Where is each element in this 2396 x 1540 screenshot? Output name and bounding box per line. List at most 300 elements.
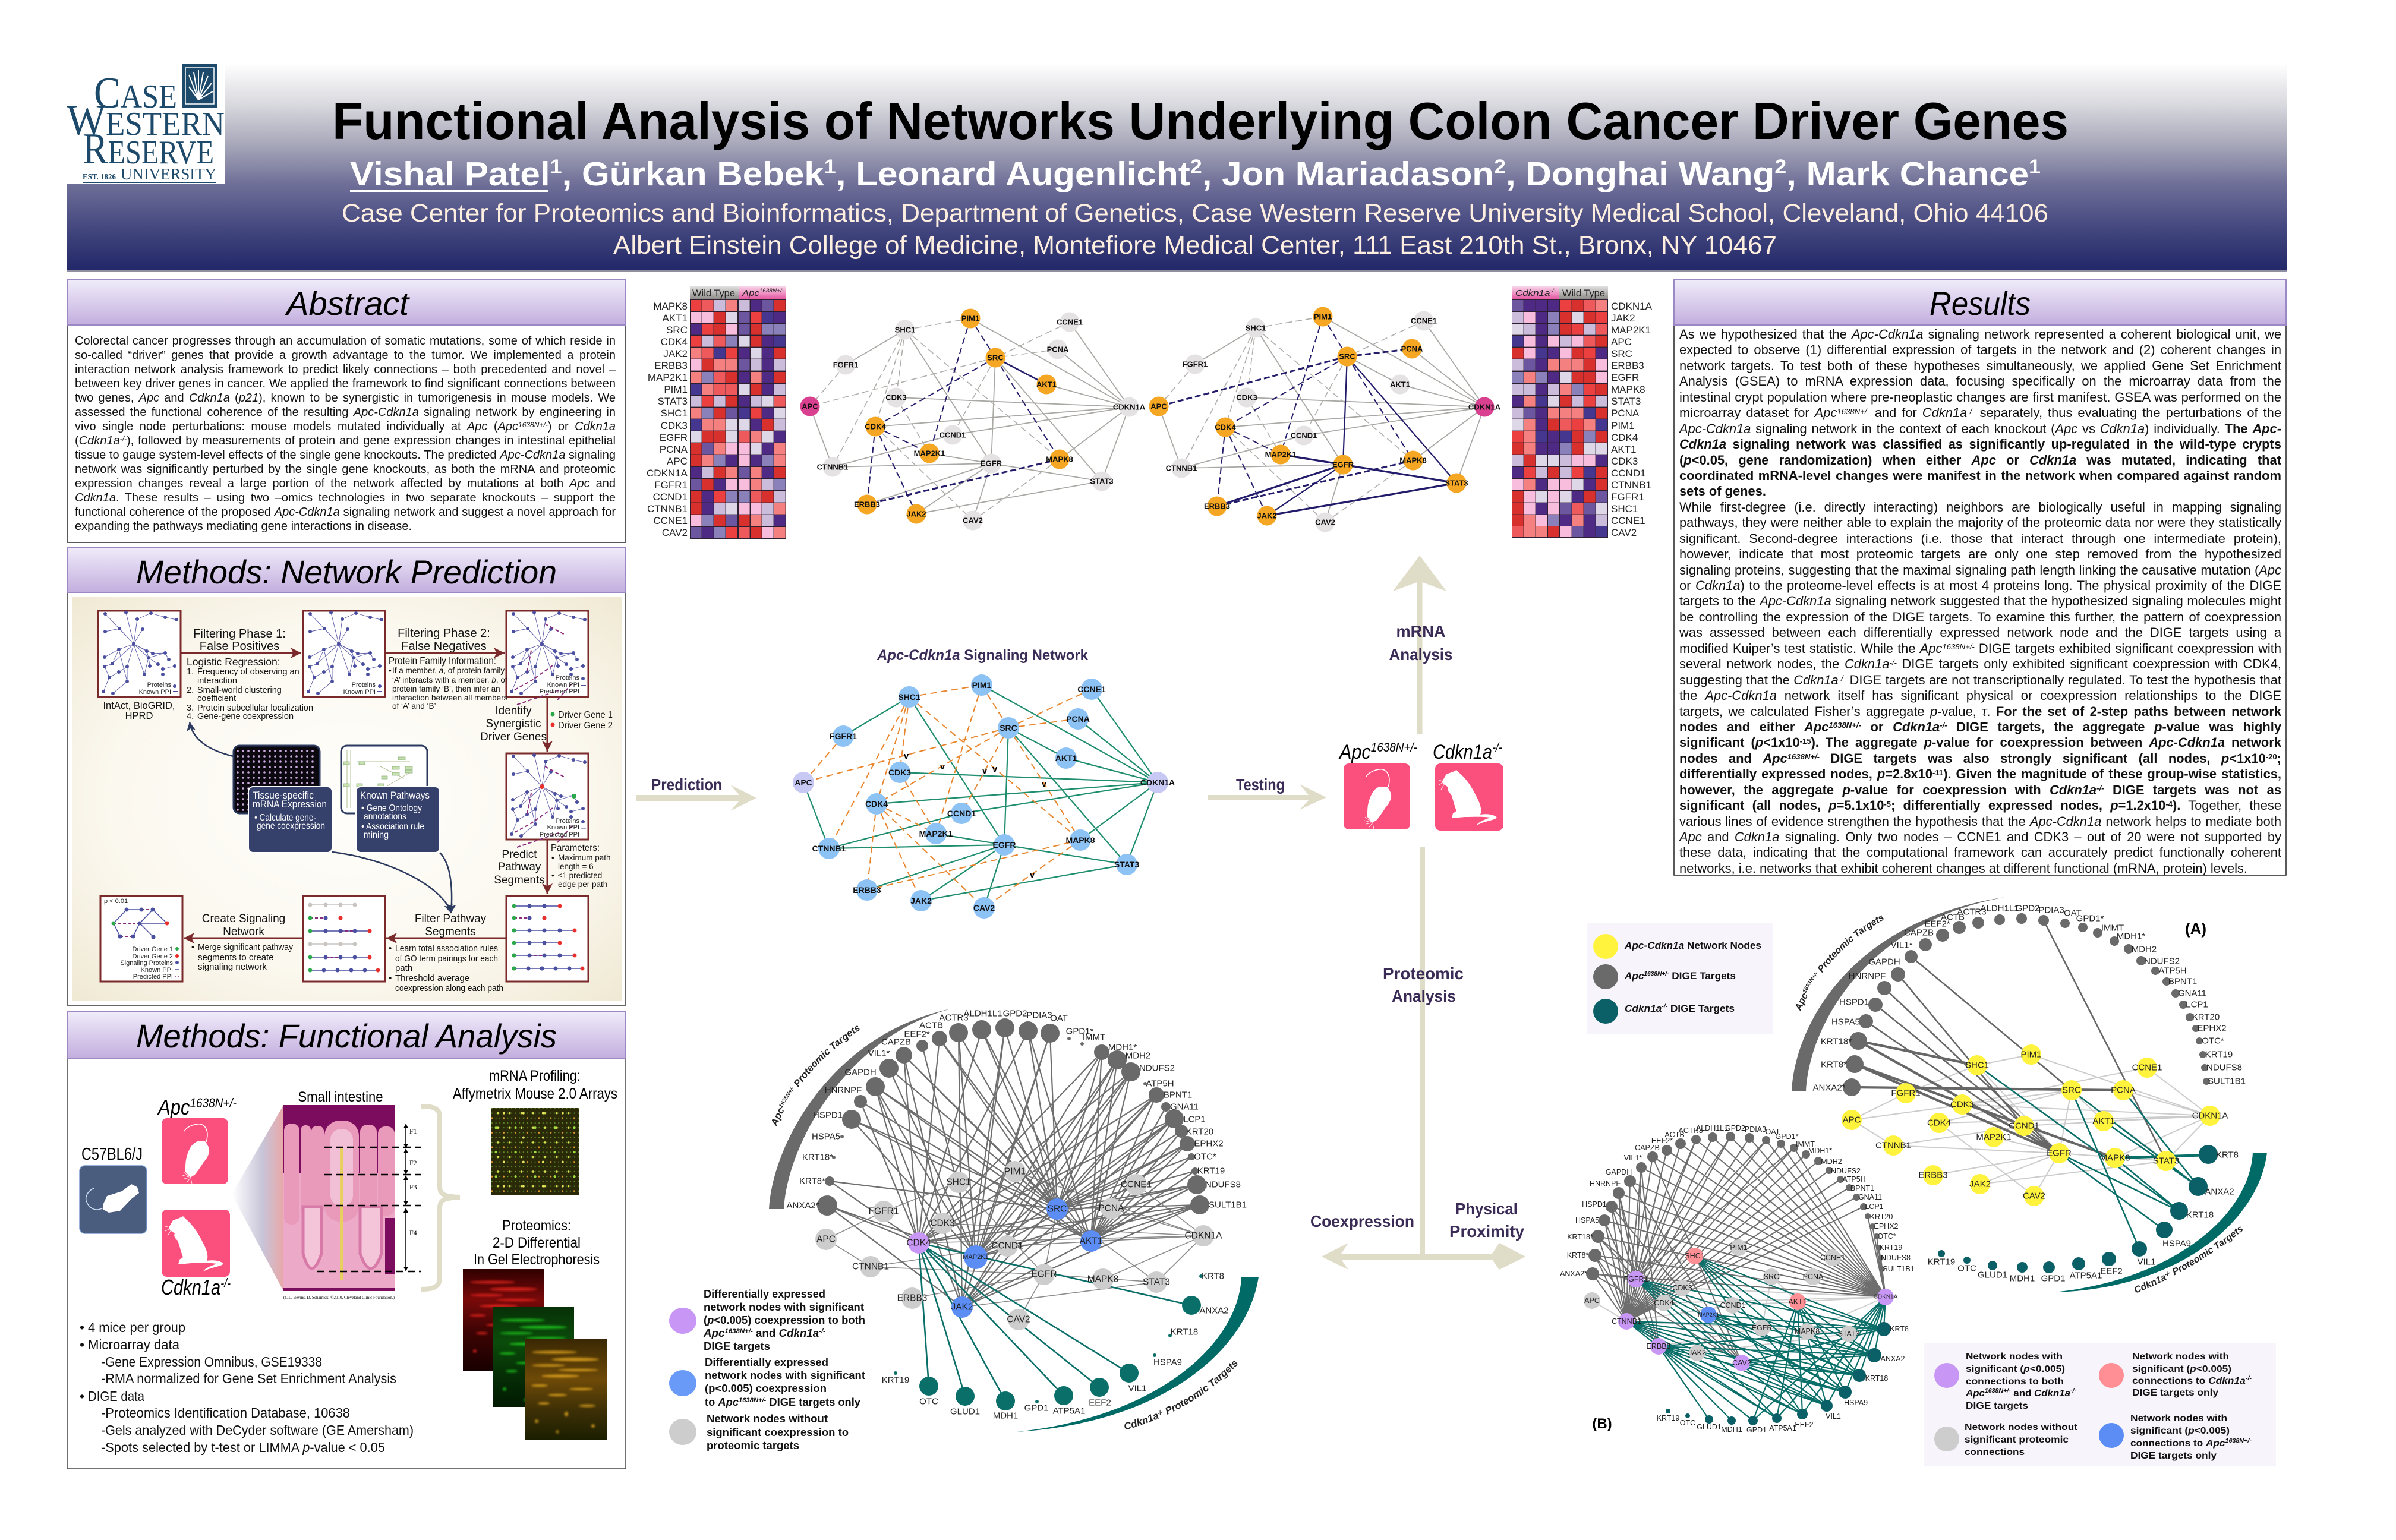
outer target labels: ACTR3 xyxy=(939,1012,969,1023)
logo: Case Western Reserve University: UNIVERSITY xyxy=(121,165,216,183)
nodes: CDKN1A xyxy=(1113,403,1146,411)
abstract text: vivo single node perturbations: mouse models mutated individually at Apc (Apc1638N+/-) or Cdkn1a xyxy=(75,420,616,433)
methods bullet list: -Proteomics Identification Database, 10638 xyxy=(101,1405,350,1421)
small intestine illustration: Small intestine xyxy=(298,1089,383,1105)
panel: abstract frame xyxy=(67,280,626,542)
outer target labels: MDH1 xyxy=(1721,1425,1742,1434)
legend: physical proximity network B: -/- xyxy=(2070,1388,2077,1394)
legend: physical proximity network B: 1638N+/- xyxy=(2225,1438,2252,1444)
outer target labels: ACTR3 xyxy=(1679,1126,1703,1135)
heatmap gene labels: AKT1 xyxy=(1611,444,1637,455)
heatmap gene labels: EGFR xyxy=(1611,372,1639,383)
figure captions: Predict xyxy=(502,848,537,861)
mRNA network: Apc knockout xyxy=(800,309,1146,530)
heatmap gene labels: AKT1 xyxy=(662,313,688,324)
abstract text: functional coherence of the proposed Apc-Cdkn1a signaling network and suggest a novel approach for xyxy=(75,506,616,519)
nodes: STAT3 xyxy=(1445,479,1468,487)
outer target labels: EEF2* xyxy=(904,1029,930,1040)
figure captions: • xyxy=(389,973,392,983)
legend: coexpression network: 1638N+/- xyxy=(724,1328,753,1335)
nodes: CDKN1A xyxy=(1140,778,1175,787)
nodes: SHC1 xyxy=(895,326,915,334)
outer target labels: GAPDH xyxy=(1868,957,1900,967)
outer target labels: ACTR3 xyxy=(1957,907,1987,917)
panel: methods network prediction xyxy=(67,547,626,1005)
legend: coexpression network: DIGE targets xyxy=(704,1340,770,1352)
nodes: APC xyxy=(802,402,818,411)
legend: physical proximity node colours: Apc-Cdkn1a Network Nodes xyxy=(1624,940,1761,951)
figure captions: edge per path xyxy=(558,880,607,889)
nodes: MAPK8 xyxy=(1046,455,1073,463)
network nodes: ERBB3 xyxy=(897,1293,927,1304)
authors: 1 xyxy=(2029,156,2041,178)
figure captions: Network xyxy=(223,926,264,938)
outer target labels: ANXA2 xyxy=(2205,1187,2234,1197)
nodes: CCNE1 xyxy=(1057,317,1083,327)
arc: Apc proteomic targets xyxy=(1792,897,2005,1091)
network nodes: PCNA xyxy=(1098,1204,1124,1213)
wild type mouse: C57BL6/J xyxy=(81,1145,143,1164)
card: known pathways: mining xyxy=(364,830,389,840)
outer target labels: GPD2 xyxy=(1725,1124,1745,1132)
physical proximity network B xyxy=(1560,1124,1915,1434)
heatmap gene labels: CCND1 xyxy=(1611,468,1646,479)
outer target labels: GPD1 xyxy=(1024,1403,1048,1413)
heatmap gene labels: JAK2 xyxy=(663,348,688,359)
heatmap gene labels: PIM1 xyxy=(1611,420,1635,431)
heatmap gene labels: CCND1 xyxy=(652,491,688,503)
outer target labels: HNRNPF xyxy=(1590,1179,1621,1188)
network nodes: CCND1 xyxy=(1720,1301,1746,1309)
panel: results frame xyxy=(1674,280,2286,875)
Apc mouse xyxy=(157,1095,237,1184)
heatmap gene labels: MAPK8 xyxy=(653,301,688,312)
outer target labels: CAPZB xyxy=(881,1037,911,1047)
figure captions: Filter Pathway xyxy=(415,913,487,925)
network nodes: STAT3 xyxy=(2153,1156,2179,1166)
outer target labels: KRT19 xyxy=(882,1375,909,1386)
arc: Cdkn1a proteomic targets: Cdkn1a xyxy=(1124,1413,1159,1429)
network nodes: PIM1 xyxy=(1004,1167,1026,1176)
abstract text: so-called “driver” genes that provide a growth advantage to the tumor. We implemented a protein xyxy=(75,349,616,362)
outer target labels: OTC xyxy=(1680,1419,1695,1427)
outer target labels: GNA11 xyxy=(1858,1193,1882,1201)
outer target labels: VIL1* xyxy=(1891,940,1913,951)
box legends: Proteins xyxy=(556,674,579,681)
results text: pathways, they were neither able to explain the majority of the proteomic data nor were they statistically xyxy=(1679,515,2281,530)
authors xyxy=(350,155,2041,193)
heatmap gene labels: CCNE1 xyxy=(1611,515,1645,526)
arc: Apc proteomic targets: Proteomic Targets xyxy=(1814,913,1886,977)
network nodes: MAP2K1 xyxy=(1976,1132,2012,1142)
outer target labels: ANXA2* xyxy=(1560,1270,1587,1278)
arc: Apc proteomic targets: Apc xyxy=(1796,993,1808,1011)
knockout mice xyxy=(1338,741,1503,831)
legend: coexpression network: significant coexpression to xyxy=(707,1427,849,1438)
legend: coexpression network: Apc xyxy=(703,1327,753,1339)
figure captions: Filtering Phase 2: xyxy=(398,627,490,640)
figure captions: of ‘A’ and ‘B’ xyxy=(392,702,436,711)
outer target labels: KRT8* xyxy=(1567,1251,1588,1260)
physical proximity network B: (B) xyxy=(1592,1416,1612,1432)
abstract text: network was significantly perturbed by the single gene knockouts, as both the mRNA and proteomic xyxy=(75,463,616,476)
panel: methods functional analysis xyxy=(67,1012,626,1469)
affiliation 2: Albert Einstein College of Medicine, Montefiore Medical Center, 111 East 210th St., Bronx, NY 10467 xyxy=(613,231,1777,260)
proteomics gels: Proteomics: xyxy=(502,1217,571,1234)
outer target labels: HNRNPF xyxy=(825,1085,862,1096)
nodes: JAK2 xyxy=(1257,511,1277,520)
outer target labels: KRT8* xyxy=(1821,1060,1847,1069)
network nodes: MAPK8 xyxy=(1795,1327,1820,1336)
outer target labels: GNA11 xyxy=(1170,1102,1199,1112)
legend: physical proximity node colours: 1638N+/- xyxy=(1644,971,1669,977)
heatmap cells xyxy=(691,300,786,538)
network nodes: STAT3 xyxy=(1143,1277,1170,1287)
nodes: AKT1 xyxy=(1036,380,1057,389)
nodes: APC xyxy=(795,778,812,787)
arrow: prediction xyxy=(636,775,756,811)
abstract text: two genes, Apc and Cdkn1a (p21), known to be synergistic in tumorigenesis in mouse models. We xyxy=(75,392,616,405)
legend: physical proximity network B: DIGE targets xyxy=(1966,1401,2028,1411)
results text: modified Kuiper’s test statistic. While the Apc1638N+/- DIGE targets exhibited significant coexpression with xyxy=(1679,641,2281,656)
network nodes: FGFR1 xyxy=(869,1206,898,1217)
figure captions: Protein subcellular localization xyxy=(197,703,313,713)
outer target labels: OAT xyxy=(2064,908,2082,919)
nodes: FGFR1 xyxy=(833,360,858,370)
authors: 2 xyxy=(1494,156,1506,178)
heatmap gene labels: SRC xyxy=(1611,348,1632,359)
outer target labels: VIL1 xyxy=(1826,1412,1841,1421)
outer target nodes xyxy=(1843,913,2210,1096)
legend: coexpression network: Network nodes without xyxy=(707,1413,828,1425)
abstract text: expanding the pathways mediating gene interactions in disease. xyxy=(75,520,412,533)
authors: , Donghai Wang xyxy=(1506,155,1774,193)
heatmap gene labels: STAT3 xyxy=(658,396,688,407)
network nodes: ERBB3 xyxy=(1646,1342,1671,1350)
outer target labels: GPD1* xyxy=(1776,1132,1799,1141)
arc: Apc proteomic targets: 1638N+/- xyxy=(1803,972,1817,993)
small intestine illustration: (C.L. Bevins, D. Schamick. ©2010, Cleveland Clinic Foundation.) xyxy=(283,1295,395,1300)
legend marks for boxes xyxy=(173,677,586,828)
box legends: Predicted PPI xyxy=(540,688,579,695)
heatmap gene labels: ERBB3 xyxy=(1611,360,1644,371)
abstract text xyxy=(75,334,616,534)
abstract text: expression changes reveal a large portion of the network affected by mutations at both Apc and xyxy=(75,477,616,490)
outer target labels: KRT18 xyxy=(1865,1374,1888,1383)
heatmap: Cdkn1a vs wild type xyxy=(1512,286,1653,538)
outer target labels: ANXA2* xyxy=(1812,1083,1846,1093)
outer target labels: EEF2 xyxy=(2100,1267,2123,1276)
arrows: proteomic analysis, coexpression and physical proximity: Physical xyxy=(1455,1200,1518,1218)
network nodes: FGFR1 xyxy=(1624,1275,1648,1283)
network nodes: SHC1 xyxy=(1965,1060,1989,1071)
outer target labels: SULT1B1 xyxy=(1883,1265,1915,1273)
title banner xyxy=(65,64,2287,272)
nodes: CCNE1 xyxy=(1077,684,1106,694)
network nodes: CCNE1 xyxy=(1820,1254,1845,1262)
heatmap gene labels: CDKN1A xyxy=(1611,301,1653,312)
network nodes: SHC1 xyxy=(1685,1252,1705,1260)
figure captions: Driver Gene 2 xyxy=(558,721,613,731)
figure captions: Small-world clustering xyxy=(197,686,282,695)
network nodes: CTNNB1 xyxy=(852,1262,889,1271)
network nodes: SRC xyxy=(2062,1085,2081,1096)
authors: , Mark Chance xyxy=(1786,155,2029,193)
methods bullet list: -Gels analyzed with DeCyder software (GE Amersham) xyxy=(101,1422,414,1438)
outer target labels: GPD1* xyxy=(2076,914,2104,923)
network nodes: CDKN1A xyxy=(1185,1231,1222,1241)
mRNA profiling: mRNA Profiling: xyxy=(489,1068,581,1084)
outer target labels: KRT20 xyxy=(1186,1126,1213,1137)
heatmap gene labels: CTNNB1 xyxy=(1611,479,1651,491)
heatmap gene labels: SHC1 xyxy=(661,408,688,419)
network prediction boxes xyxy=(98,611,588,982)
network nodes: CCNE1 xyxy=(2132,1062,2162,1073)
abstract text: tissue to gauge system-level effects of the single gene knockouts. The predicted Apc-Cdkn1a signaling xyxy=(75,449,616,462)
outer target labels: KRT19 xyxy=(1880,1244,1902,1252)
network nodes: CCNE1 xyxy=(1121,1180,1152,1189)
nodes: PCNA xyxy=(1066,714,1090,724)
outer target labels: EEF2 xyxy=(1089,1397,1111,1408)
outer target labels: HSPD1 xyxy=(813,1110,843,1121)
outer target labels: ATP5H xyxy=(1842,1175,1866,1184)
known pathways thumbnail xyxy=(341,746,427,813)
outer target labels: GLUD1 xyxy=(1978,1270,2007,1280)
legend: coexpression network: -/- xyxy=(819,1328,825,1335)
heatmap gene labels: PCNA xyxy=(1611,408,1640,419)
figure captions: • xyxy=(389,943,392,954)
authors: , Jon Mariadason xyxy=(1202,155,1494,193)
heatmap gene labels: CDK4 xyxy=(661,336,688,348)
outer target labels: HSPA9 xyxy=(1844,1399,1868,1407)
network nodes: STAT3 xyxy=(1837,1330,1860,1338)
results text: intestinal crypt population where pre-neoplastic changes are first manifest. GSEA was performed on the xyxy=(1679,390,2281,405)
methods bullet list: -Gene Expression Omnibus, GSE19338 xyxy=(101,1354,322,1369)
methods bullet list: Microarray data xyxy=(88,1337,179,1352)
figure captions: Segments xyxy=(494,874,545,886)
network nodes: CDKN1A xyxy=(1874,1294,1898,1300)
results text: however, indicate that most proteomic targets are only one step removed from the hypothesized xyxy=(1679,547,2281,561)
legend: coexpression network: and xyxy=(753,1327,779,1339)
figure captions: coefficient xyxy=(197,694,236,703)
outer target labels: KRT8 xyxy=(1202,1271,1224,1281)
outer target labels: KRT18* xyxy=(1821,1036,1852,1047)
abstract text: Cdkn1a. These results – using two –omics technologies in two separate knockouts – support the xyxy=(75,491,616,504)
nodes: FGFR1 xyxy=(1183,360,1208,368)
legend: coexpression network: network nodes with significant xyxy=(705,1369,865,1381)
results text: significant (all nodes, p=5.1x10-5; differentially expressed nodes, p=1.2x10-4). Together, these xyxy=(1679,798,2281,813)
legend: coexpression network: Differentially expressed xyxy=(705,1356,828,1368)
small intestine illustration xyxy=(232,1089,421,1300)
card: known pathways: annotations xyxy=(364,812,406,822)
nodes: CDK4 xyxy=(865,422,886,431)
network nodes: CDK3 xyxy=(1672,1284,1692,1292)
figure captions: Synergistic xyxy=(486,718,541,730)
nodes: CDK4 xyxy=(865,799,888,809)
outer target labels: ACTB xyxy=(1664,1131,1685,1139)
network nodes: CDK4 xyxy=(1927,1118,1951,1128)
outer target labels: GPD2 xyxy=(2016,903,2039,914)
outer target labels: ANXA2 xyxy=(1199,1306,1229,1315)
heatmap: Cdkn1a vs wild type: Wild Type xyxy=(1562,288,1605,299)
outer target labels: ACTB xyxy=(1941,913,1965,922)
arrow: testing: Testing xyxy=(1236,775,1285,794)
outer target labels: KRT18* xyxy=(1567,1233,1593,1241)
outer target labels: OTC* xyxy=(1194,1151,1216,1162)
methods bullet list: • xyxy=(80,1320,84,1335)
authors: 2 xyxy=(1190,156,1202,178)
authors: Vishal Patel xyxy=(350,155,540,193)
nodes: CCND1 xyxy=(1291,431,1317,440)
outer target labels: NDUFS8 xyxy=(1881,1254,1911,1262)
figure captions: Frequency of observing an xyxy=(197,667,300,677)
figure captions: 4. xyxy=(187,712,194,721)
outer target labels: ALDH1L1 xyxy=(963,1009,1002,1018)
outer target labels: GLUD1 xyxy=(1697,1423,1722,1431)
outer target labels: ATP5H xyxy=(2158,966,2187,976)
results text: targets, we calculated Fisher’s aggregate p-value, τ. For the set of 2-step paths between network xyxy=(1679,703,2281,719)
outer target labels: ALDH1L1 xyxy=(1980,903,2019,914)
network nodes: MAP2K1 xyxy=(1698,1312,1719,1318)
nodes: CDKN1A xyxy=(1468,403,1501,411)
box legends xyxy=(120,674,579,980)
figure captions: Segments xyxy=(425,926,476,938)
results text: significant. Second-degree interactions (i.e. those that interact through one intermediate protein), xyxy=(1679,531,2281,546)
heatmap: wild type vs Apc: 1638N+/- xyxy=(759,288,784,294)
network nodes: CDK4 xyxy=(1654,1299,1674,1307)
heatmap gene labels: CDK3 xyxy=(1611,456,1638,467)
results text: Analysis (GSEA) to mRNA expression data, focusing specifically on the microarray data from the xyxy=(1679,374,2281,389)
nodes: JAK2 xyxy=(910,896,932,905)
results text: sets of genes. xyxy=(1679,484,1766,498)
outer target labels: LCP1 xyxy=(2186,999,2208,1010)
heatmap gene labels: CDK4 xyxy=(1611,432,1638,443)
outer target labels: KRT18 xyxy=(2186,1210,2214,1220)
arc: Cdkn1a proteomic targets: -/- xyxy=(2164,1270,2172,1278)
figure captions: Threshold average xyxy=(395,973,469,983)
arc: Cdkn1a proteomic targets: Proteomic Targets xyxy=(2168,1224,2245,1279)
signaling network result: p < 0.01 xyxy=(104,898,128,905)
nodes: CTNNB1 xyxy=(1166,463,1197,473)
legend: physical proximity network B: DIGE targets only xyxy=(2132,1388,2218,1398)
heatmap gene labels: APC xyxy=(667,456,688,467)
outer target labels: OAT xyxy=(1766,1128,1780,1136)
nodes: AKT1 xyxy=(1055,753,1077,763)
legend: physical proximity node colours: DIGE Targets xyxy=(1667,1003,1735,1014)
box legends: Driver Gene 1 xyxy=(133,946,173,953)
heatmap cells xyxy=(1512,300,1607,537)
heatmap gene labels: CDK3 xyxy=(661,420,688,431)
check marks: v xyxy=(1030,870,1035,880)
network nodes: CAV2 xyxy=(1732,1359,1751,1367)
abstract text: interaction network analysis framework to predict likely connections – both precedented and novel – xyxy=(75,363,616,376)
outer target labels: NDUFS2 xyxy=(1139,1064,1175,1073)
nodes: CAV2 xyxy=(963,516,983,525)
figure captions: length = 6 xyxy=(558,862,594,871)
network nodes: EGFR xyxy=(1031,1269,1057,1280)
signaling network result xyxy=(104,898,179,976)
results text: suggesting that the Cdkn1a-/- DIGE targets are not transcriptionally regulated. To test the hypothesis that xyxy=(1679,673,2281,687)
heading: methods functional analysis: Methods: Functional Analysis xyxy=(136,1017,557,1055)
network nodes: SHC1 xyxy=(946,1178,971,1187)
outer target labels: GPD1 xyxy=(2041,1274,2065,1283)
outer target labels: BPNT1 xyxy=(2168,977,2197,986)
legend: physical proximity network B: connections xyxy=(1965,1447,2025,1457)
arrows: proteomic analysis, coexpression and physical proximity: Analysis xyxy=(1392,987,1456,1005)
figure captions: coexpression along each path xyxy=(395,983,503,993)
mRNA profiling: Affymetrix Mouse 2.0 Arrays xyxy=(453,1085,617,1102)
knockout mice: Apc xyxy=(1339,741,1374,763)
network nodes: CDK3 xyxy=(1950,1099,1974,1110)
outer target labels: IMMT xyxy=(1083,1033,1105,1042)
arc: Apc proteomic targets: Proteomic Targets xyxy=(794,1025,859,1087)
legend: physical proximity node colours xyxy=(1587,923,1773,1034)
nodes: CAV2 xyxy=(973,903,995,913)
card: known pathways: • Gene Ontology xyxy=(361,803,422,813)
figure captions: segments to create xyxy=(198,952,274,962)
heading: Apc-Cdkn1a signaling network: Apc-Cdkn1a Signaling Network xyxy=(877,647,1088,664)
network nodes: PCNA xyxy=(1803,1273,1824,1281)
figure captions: Create Signaling xyxy=(202,913,285,925)
results text: signaling proteins, suggesting that the maximal signaling path length linking the causative mutation (Apc xyxy=(1679,563,2281,578)
legend: coexpression network: proteomic targets xyxy=(707,1440,799,1451)
box legends: Proteins xyxy=(556,818,579,825)
check marks: v xyxy=(982,766,988,776)
nodes: MAPK8 xyxy=(1399,456,1427,465)
abstract text: between key driver genes in cancer. We applied the framework to find significant connections between xyxy=(75,377,616,390)
outer target labels: KRT19 xyxy=(2205,1049,2233,1060)
outer target labels: ATP5A1 xyxy=(1769,1424,1796,1432)
curved arrows xyxy=(190,722,452,913)
network nodes: CDK3 xyxy=(930,1218,955,1229)
heatmap gene labels: ERBB3 xyxy=(654,360,688,371)
wild type mouse xyxy=(80,1145,147,1233)
legend: physical proximity network B: 1638N+/- xyxy=(1985,1388,2011,1394)
heatmap gene labels: MAPK8 xyxy=(1611,384,1645,395)
nodes: CDK4 xyxy=(1215,423,1236,431)
outer target labels: MDH2 xyxy=(1126,1050,1150,1061)
heatmap gene labels: SHC1 xyxy=(1611,503,1638,515)
outer target labels: EEF2* xyxy=(1651,1137,1673,1145)
outer target labels: SULT1B1 xyxy=(2208,1077,2246,1086)
check marks: v xyxy=(992,764,998,774)
network nodes xyxy=(815,1161,1222,1330)
box legends: Predicted PPI xyxy=(133,973,173,980)
outer target labels: PDIA3 xyxy=(1745,1125,1766,1134)
legend: coexpression network: Cdkn1a xyxy=(779,1327,825,1339)
legend: coexpression network xyxy=(669,1288,865,1451)
outer target labels: NDUFS8 xyxy=(2206,1062,2242,1073)
nodes: CCND1 xyxy=(947,809,976,818)
outer target labels: KRT8 xyxy=(2216,1150,2239,1160)
outer target nodes xyxy=(1586,1132,1885,1280)
outer target labels: CAPZB xyxy=(1635,1144,1660,1152)
results text xyxy=(1679,327,2281,876)
Apc mouse: 1638N+/- xyxy=(190,1096,237,1110)
network nodes: PCNA xyxy=(2111,1085,2136,1096)
methods bullet list: -RMA normalized for Gene Set Enrichment Analysis xyxy=(101,1371,396,1386)
figure captions: • xyxy=(551,853,554,862)
figure captions: Protein Family Information: xyxy=(389,655,496,667)
logo: Case Western Reserve University: RESERVE xyxy=(83,125,214,173)
legend: physical proximity node colours: -/- xyxy=(1662,1003,1668,1010)
legend: physical proximity network B: Apc xyxy=(1965,1388,2011,1399)
outer target labels: HSPA5 xyxy=(1575,1216,1599,1225)
knockout mice: Cdkn1a xyxy=(1433,741,1502,763)
legend: coexpression network: 1638N+/- xyxy=(739,1397,767,1404)
authors: , Leonard Augenlicht xyxy=(836,155,1190,193)
outer target labels: EPHX2 xyxy=(1194,1138,1224,1149)
